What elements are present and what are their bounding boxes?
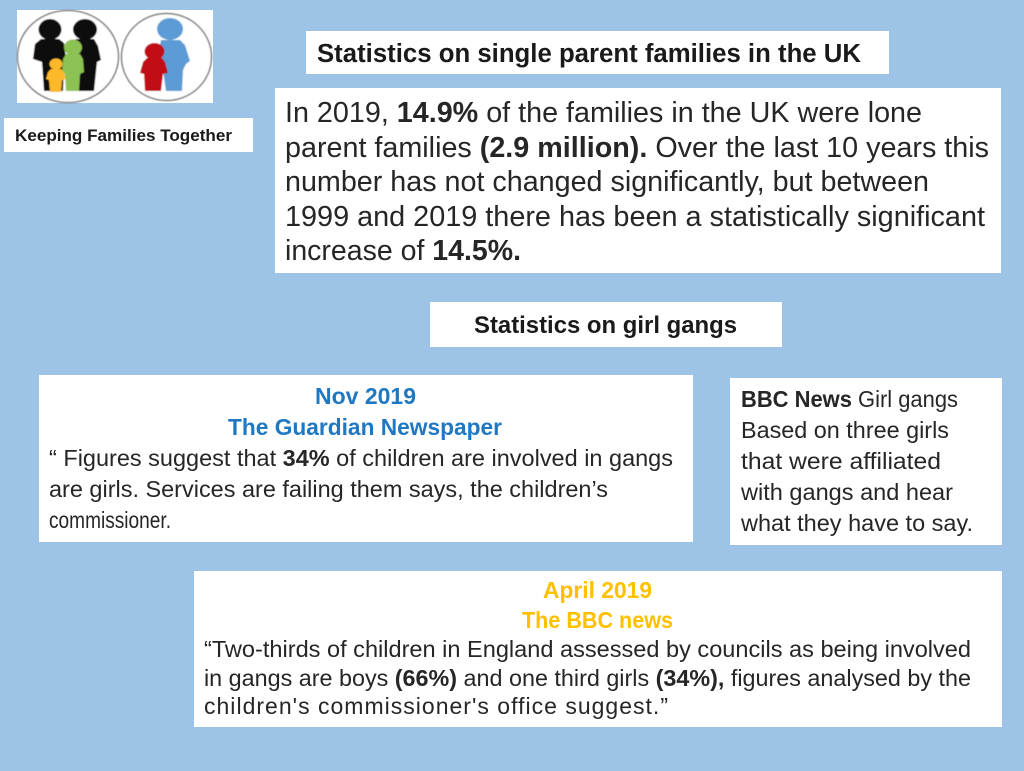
panel: BBC News girl gangs note: with gangs and hear xyxy=(740,479,953,505)
panel: Guardian quote xyxy=(39,375,693,542)
heading: single parent statistics xyxy=(306,31,889,74)
panel: BBC news quote: The BBC news xyxy=(522,607,673,633)
panel: BBC News girl gangs note: BBC News Girl gangs xyxy=(741,386,958,412)
panel: BBC News girl gangs note: that were affiliated xyxy=(741,448,941,474)
logo: family icons xyxy=(17,10,213,103)
panel: Guardian quote: are girls. Services are failing them says, the children’s xyxy=(49,476,608,502)
panel: BBC news quote: in gangs are boys (66%) and one third girls (34%), figures analysed by the xyxy=(204,665,971,691)
icon: two black parents xyxy=(33,19,101,91)
icon: green child xyxy=(62,40,84,91)
panel: Guardian quote: commissioner. xyxy=(49,507,171,533)
panel: single parent statistics text: increase of 14.5%. xyxy=(285,235,521,267)
icon: blue parent xyxy=(157,18,190,91)
panel: single parent statistics text xyxy=(275,88,1001,273)
panel: BBC news quote xyxy=(194,571,1002,727)
icon: yellow child xyxy=(46,58,66,92)
panel: BBC news quote: April 2019 xyxy=(543,577,652,603)
icon: red child xyxy=(140,43,168,91)
heading: girl gangs statistics xyxy=(430,302,782,347)
panel: BBC News girl gangs note xyxy=(730,378,1002,545)
panel: single parent statistics text: number has not changed significantly, but between xyxy=(285,166,929,198)
organisation name label xyxy=(4,118,253,152)
panel: single parent statistics text: parent families (2.9 million). Over the last 10 years this xyxy=(285,132,989,164)
panel: Guardian quote: Nov 2019 xyxy=(315,383,416,409)
heading: single parent statistics: Statistics on single parent families in the UK xyxy=(317,40,862,68)
organisation name label: Keeping Families Together xyxy=(15,126,232,145)
panel: Guardian quote: “ Figures suggest that 34% of children are involved in gangs xyxy=(49,445,673,471)
panel: BBC News girl gangs note: what they have to say. xyxy=(740,510,973,536)
panel: BBC news quote: children's commissioner's office suggest.” xyxy=(204,693,668,719)
panel: single parent statistics text: In 2019, 14.9% of the families in the UK were lone xyxy=(285,97,922,129)
panel: BBC News girl gangs note: Based on three girls xyxy=(741,417,949,443)
panel: single parent statistics text: 1999 and 2019 there has been a statistically significant xyxy=(285,201,985,233)
panel: BBC news quote: “Two-thirds of children in England assessed by councils as being involved xyxy=(204,636,971,662)
panel: Guardian quote: The Guardian Newspaper xyxy=(228,414,502,440)
heading: girl gangs statistics: Statistics on girl gangs xyxy=(474,312,737,339)
